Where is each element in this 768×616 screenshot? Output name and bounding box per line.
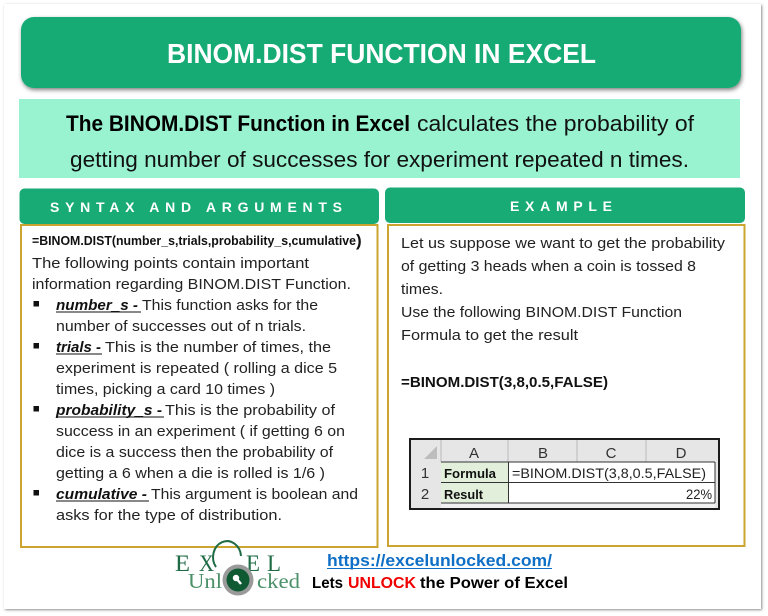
bullet: cumulative — [34, 486, 358, 524]
bullet: trials: experiment is repeated ( rolling a dice 5 — [56, 360, 337, 377]
definition panel — [19, 99, 740, 178]
syntax formula: ) — [356, 231, 362, 250]
logo: Excel Unlocked: cked — [257, 569, 301, 593]
spreadsheet screenshot: Result — [444, 487, 484, 502]
panel: example — [385, 188, 745, 546]
bullet: cumulative: asks for the type of distribution. — [56, 507, 282, 524]
example header — [385, 188, 745, 223]
example text: of getting 3 heads when a coin is tossed 8 — [401, 258, 696, 275]
intro text: information regarding BINOM.DIST Function. — [32, 276, 351, 293]
panel: syntax and arguments — [20, 188, 379, 547]
syntax box — [21, 225, 378, 547]
tagline — [312, 575, 568, 592]
spreadsheet screenshot: 22% — [686, 487, 712, 502]
bullet: trials: times, picking a card 10 times ) — [56, 381, 275, 398]
intro text: The following points contain important — [32, 255, 310, 272]
definition panel: The BINOM.DIST Function in Excel — [66, 111, 410, 136]
example header: EXAMPLE — [510, 198, 612, 214]
logo: Excel Unlocked: L — [267, 551, 281, 576]
website link: https://excelunlocked.com/ — [327, 551, 552, 570]
syntax header: SYNTAX AND ARGUMENTS — [50, 199, 342, 215]
example text: Formula to get the result — [401, 327, 579, 344]
logo: Excel Unlocked: E — [246, 551, 260, 576]
bullet: trials — [34, 339, 337, 398]
spreadsheet screenshot: D — [676, 445, 687, 462]
tagline: the Power of Excel — [420, 575, 568, 592]
title banner: BINOM.DIST FUNCTION IN EXCEL — [167, 38, 596, 69]
spreadsheet screenshot: 1 — [421, 465, 429, 482]
bullet: probability_s — [34, 402, 345, 482]
bullet: probability_s: probability_s - — [55, 402, 162, 419]
bullet: number_s: number of successes out of n trials. — [56, 318, 306, 335]
bullet: number_s: This function asks for the — [142, 297, 318, 314]
spreadsheet screenshot: A — [469, 445, 479, 462]
definition panel: getting number of successes for experiment repeated n times. — [70, 147, 689, 172]
example text: Let us suppose we want to get the probability — [401, 235, 726, 252]
syntax header — [20, 188, 379, 224]
example text: Use the following BINOM.DIST Function — [401, 304, 682, 321]
bullet: number_s — [34, 297, 318, 335]
bullet: probability_s: dice is a success then the probability of — [56, 444, 334, 461]
tagline: UNLOCK — [348, 575, 417, 592]
bullet: probability_s: success in an experiment ( if getting 6 on — [56, 423, 345, 440]
spreadsheet screenshot: =BINOM.DIST(3,8,0.5,FALSE) — [512, 466, 706, 481]
tagline: Lets — [312, 575, 343, 592]
logo: Excel Unlocked: E — [175, 551, 190, 576]
intro text — [32, 255, 351, 293]
bullet: trials: This is the number of times, the — [105, 339, 331, 356]
example formula: =BINOM.DIST(3,8,0.5,FALSE) — [401, 375, 608, 391]
spreadsheet screenshot: B — [538, 445, 548, 462]
spreadsheet screenshot: Formula — [444, 466, 497, 481]
logo: Excel Unlocked: X — [199, 551, 214, 576]
example text — [401, 235, 726, 344]
spreadsheet screenshot: C — [606, 445, 617, 462]
bullet: number_s: number_s - — [56, 297, 138, 314]
bullet: trials: trials - — [56, 339, 101, 356]
spreadsheet screenshot: 2 — [421, 486, 429, 503]
syntax formula: =BINOM.DIST(number_s,trials,probability_s,cumulative — [32, 233, 356, 248]
bullet: probability_s: getting a 6 when a die is rolled is 1/6 ) — [56, 465, 325, 482]
bullet: cumulative: This argument is boolean and — [151, 486, 358, 503]
example box — [388, 225, 744, 546]
title banner — [21, 17, 741, 88]
bullet: cumulative: cumulative - — [56, 486, 147, 503]
definition panel: calculates the probability of — [417, 111, 695, 136]
example text: times. — [401, 281, 443, 298]
bullet: probability_s: This is the probability of — [165, 402, 336, 419]
logo: Excel Unlocked: Unl — [188, 569, 222, 593]
logo: Excel Unlocked — [175, 541, 301, 596]
spreadsheet screenshot — [410, 439, 719, 509]
